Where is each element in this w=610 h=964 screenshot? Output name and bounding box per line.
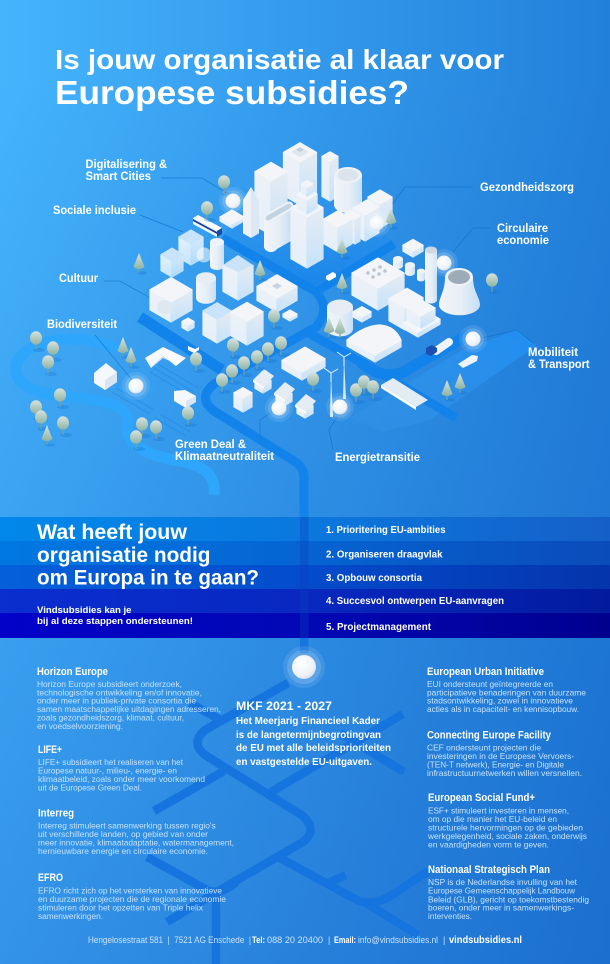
- heading: what does your organisation need: organisatie nodig: [37, 544, 210, 567]
- text block: MKF 2021-2027: de EU met alle beleidsprioriteiten: [236, 743, 391, 754]
- text block: MKF 2021-2027: Het Meerjarig Financieel Kader: [236, 716, 380, 727]
- theme labels: Smart Cities: [86, 171, 151, 183]
- text block: LIFE+: klimaatbeleid, zoals onder meer voorkomend: [38, 774, 205, 784]
- text block: Nationaal Strategisch Plan: [428, 864, 589, 921]
- footer contact line: |: [443, 935, 445, 945]
- text block: EFRO: stimuleren door het opzetten van Triple helix: [38, 903, 204, 913]
- text block: MKF 2021-2027: MKF 2021 - 2027: [236, 699, 332, 713]
- text block: Nationaal Strategisch Plan: Beleid (GLB), gericht op toekomstbestendig: [428, 894, 589, 904]
- support note: [37, 605, 193, 627]
- text block: European Urban Initiative: participatieve benaderingen van duurzame: [427, 687, 586, 697]
- text block: MKF 2021-2027: [236, 699, 391, 768]
- theme labels: Sociale inclusie: [53, 205, 136, 217]
- steps list: 5. Projectmanagement: [326, 622, 432, 633]
- text block: Horizon Europe: Horizon Europe: [37, 666, 108, 678]
- text block: Interreg: meer innovatie, klimaatadaptatie, watermanagement,: [38, 838, 234, 848]
- steps list: 1. Prioritering EU-ambities: [326, 525, 446, 536]
- downtown ground plate: [222, 190, 394, 290]
- road network: [140, 238, 470, 520]
- text block: Horizon Europe: zoals gezondheidszorg, klimaat, cultuur,: [37, 713, 184, 723]
- city: south district with panels and turbines: [234, 347, 428, 418]
- river: [16, 339, 214, 495]
- text block: European Urban Initiative: stadsontwikkeling, zowel in innovatieve: [427, 696, 573, 706]
- text block: Nationaal Strategisch Plan: interventies.: [428, 911, 472, 921]
- text block: EFRO: EFRO richt zich op het versterken van innovatieve: [38, 885, 222, 895]
- text block: European Urban Initiative: acties als in capaciteit- en kennisopbouw.: [427, 704, 579, 714]
- text block: European Social Fund+: werkgelegenheid, sociale zaken, onderwijs: [427, 831, 588, 841]
- title: [55, 44, 504, 111]
- text block: Connecting Europe Facility: [427, 730, 582, 778]
- heading: what does your organisation need: Wat heeft jouw: [37, 521, 188, 544]
- text block: Nationaal Strategisch Plan: boeren, onder meer in samenwerkings-: [428, 903, 574, 913]
- text block: LIFE+: LIFE+ subsidieert het realiseren van het: [38, 757, 184, 767]
- footer contact line: info@vindsubsidies.nl: [358, 935, 438, 945]
- text block: Connecting Europe Facility: infrastructuurnetwerken willen versnellen.: [427, 768, 582, 778]
- text block: Horizon Europe: samen maatschappelijke uitdagingen adresseren,: [37, 704, 221, 714]
- stem to funding section: [300, 638, 308, 653]
- theme labels: Circulaire: [497, 223, 548, 235]
- theme labels: Digitalisering &: [86, 159, 167, 171]
- theme labels: Cultuur: [59, 273, 98, 285]
- trees: [30, 175, 501, 451]
- text block: Nationaal Strategisch Plan: Europese Gemeenschappelijk Landbouw: [428, 886, 576, 896]
- text block: Horizon Europe: technologische ontwikkeling en/of innovatie,: [37, 687, 202, 697]
- text block: European Urban Initiative: European Urban Initiative: [427, 666, 544, 678]
- text block: LIFE+: uit de Europese Green Deal.: [38, 783, 142, 793]
- theme labels: Energietransitie: [335, 452, 420, 464]
- text block: Interreg: [38, 808, 234, 856]
- text block: LIFE+: Europese natuur-, milieu-, energie- en: [38, 766, 177, 776]
- text block: European Social Fund+: [427, 792, 588, 850]
- text block: EFRO: samenwerkingen.: [38, 911, 103, 921]
- theme labels: Mobiliteit: [528, 347, 578, 359]
- text block: Nationaal Strategisch Plan: Nationaal Strategisch Plan: [428, 864, 550, 876]
- text block: EFRO: [38, 872, 226, 921]
- title: Is jouw organisatie al klaar voor: [55, 44, 504, 75]
- text block: Horizon Europe: onder meer in publiek-private consortia die: [37, 696, 196, 706]
- footer contact line: 088 20 20400: [267, 935, 323, 945]
- city: industrial district: [327, 239, 480, 362]
- text block: LIFE+: [38, 744, 205, 793]
- steps list: 3. Opbouw consortia: [326, 573, 422, 584]
- text block: EFRO: EFRO: [38, 872, 63, 884]
- text block: European Social Fund+: en vaardigheden vorm te geven.: [428, 840, 549, 850]
- leader lines: [95, 178, 533, 450]
- theme labels: economie: [497, 235, 549, 247]
- text block: EFRO: en duurzame projecten die de regionale economie: [38, 894, 226, 904]
- lower road network: [147, 683, 428, 964]
- text block: Interreg: hernieuwbare energie en circulaire economie.: [38, 846, 208, 856]
- text block: European Social Fund+: European Social Fund+: [428, 792, 535, 804]
- text block: European Social Fund+: ESF+ stimuleert investeren in mensen,: [428, 806, 569, 816]
- text block: Horizon Europe: en voedselvoorziening.: [37, 721, 123, 731]
- theme labels: Klimaatneutraliteit: [175, 451, 274, 463]
- title: Europese subsidies?: [55, 74, 409, 111]
- text block: MKF 2021-2027: en vastgestelde EU-uitgaven.: [236, 757, 372, 768]
- steps list: [326, 525, 504, 633]
- support note: Vindsubsidies kan je: [37, 605, 132, 616]
- footer contact line: Email:: [334, 935, 356, 945]
- heading: what does your organisation need: om Europa in te gaan?: [37, 566, 259, 590]
- waterway: [350, 330, 536, 432]
- heading: what does your organisation need: [37, 521, 259, 590]
- city: downtown towers: [220, 143, 392, 268]
- text block: European Social Fund+: structurele hervormingen op de gebieden: [428, 823, 583, 833]
- text block: Interreg: Interreg: [38, 808, 74, 820]
- theme markers: [122, 187, 487, 422]
- text block: MKF 2021-2027: is de langetermijnbegrotingvan: [236, 730, 381, 741]
- city: culture district: [150, 230, 297, 345]
- steps bands: [0, 517, 610, 638]
- text block: European Social Fund+: om op die manier het EU-beleid en: [428, 814, 557, 824]
- text block: Interreg: uit verschillende landen, op gebied van onder: [38, 829, 208, 839]
- theme labels: [47, 159, 590, 464]
- marker: funding section: [283, 646, 325, 688]
- steps list: 4. Succesvol ontwerpen EU-aanvragen: [326, 596, 504, 607]
- footer contact line: vindsubsidies.nl: [449, 934, 522, 946]
- steps list: 2. Organiseren draagvlak: [326, 550, 443, 560]
- footer contact line: |: [328, 935, 330, 945]
- text block: Connecting Europe Facility: investeringen in de Europese Vervoers-: [427, 751, 574, 761]
- text block: Interreg: Interreg stimuleert samenwerking tussen regio's: [38, 821, 216, 831]
- footer contact line: Hengelosestraat 581 | 7521 AG Enschede |: [88, 935, 251, 945]
- text block: Horizon Europe: Horizon Europe subsidieert onderzoek,: [37, 679, 182, 689]
- text block: Connecting Europe Facility: (TEN-T netwerk), Energie- en Digitale: [427, 759, 564, 769]
- text block: Nationaal Strategisch Plan: NSP is de Nederlandse invulling van het: [428, 877, 578, 887]
- text block: European Urban Initiative: EUI ondersteunt geïntegreerde en: [427, 679, 553, 689]
- theme labels: & Transport: [528, 359, 590, 371]
- theme labels: Green Deal &: [175, 439, 246, 451]
- text block: LIFE+: LIFE+: [38, 744, 62, 756]
- support note: bij al deze stappen ondersteunen!: [37, 616, 193, 627]
- farm houses with fields: [94, 347, 198, 436]
- text block: Connecting Europe Facility: CEF ondersteunt projecten die: [427, 743, 541, 753]
- text block: Connecting Europe Facility: Connecting Europe Facility: [427, 730, 551, 742]
- vehicles: [188, 215, 478, 368]
- text block: Horizon Europe: [37, 666, 221, 731]
- theme labels: Gezondheidszorg: [480, 182, 574, 194]
- theme labels: Biodiversiteit: [47, 319, 117, 331]
- footer contact line: Tel:: [252, 935, 265, 945]
- text block: European Urban Initiative: [427, 666, 586, 714]
- footer contact line: [88, 934, 522, 946]
